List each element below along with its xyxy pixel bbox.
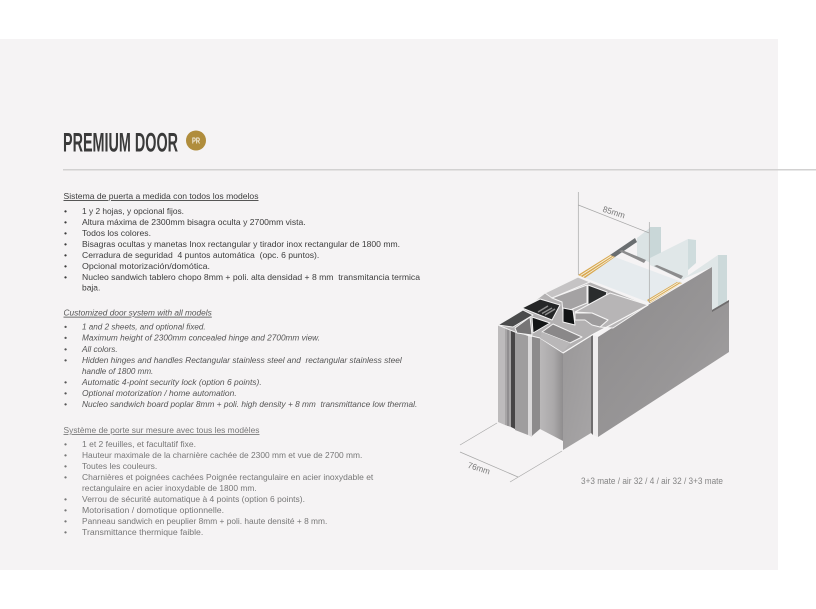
list: English features: Nucleo sandwich board poplar 8mm + poli. high density + 8 mm transmittance low thermal. [82, 399, 417, 409]
list: English features: handle of 1800 mm. [82, 366, 153, 376]
text block: English specification [64, 308, 417, 409]
list: Spanish features: Bisagras ocultas y manetas Inox rectangular y tirador inox rectangular de 1800 mm. [82, 239, 400, 249]
gasket block [522, 299, 560, 320]
gold insulation strips [578, 255, 682, 303]
list: Spanish features: Cerradura de seguridad 4 puntos automática (opc. 6 puntos). [82, 250, 319, 260]
dimension: 76mm: 76mm [466, 460, 491, 476]
text block: Spanish specification [64, 191, 420, 292]
front column and side faces [498, 325, 598, 450]
black chamber [532, 317, 550, 333]
upper flange [545, 277, 590, 298]
title: PREMIUM DOOR [63, 128, 178, 158]
list: Spanish features: Nucleo sandwich tablero chopo 8mm + poli. alta densidad + 8 mm transmitancia termica [82, 272, 420, 282]
list: French features: • [64, 450, 67, 460]
list: Spanish features: • [64, 250, 67, 260]
front edge highlight [563, 305, 648, 353]
list: French features: Transmittance thermique faible. [82, 527, 203, 537]
profile cross-section [498, 277, 648, 353]
list: French features [64, 439, 374, 537]
list: Spanish features: • [64, 217, 67, 227]
heading: French: Système de porte sur mesure avec tous les modèles [64, 425, 260, 435]
list: French features: • [64, 516, 67, 526]
list: French features: • [64, 494, 67, 504]
list: Spanish features: • [64, 261, 67, 271]
heading: Spanish: Sistema de puerta a medida con todos los modelos [64, 191, 258, 201]
lower chamber lit face [540, 332, 570, 352]
list: French features: rectangulaire en acier inoxydable de 1800 mm. [82, 483, 257, 493]
dimension: 85mm: 85mm [601, 204, 626, 220]
large right chamber [575, 293, 648, 328]
list: French features: Panneau sandwich en peuplier 8mm + poli. haute densité + 8 mm. [82, 516, 327, 526]
list: Spanish features: • [64, 239, 67, 249]
gasket slats [538, 306, 555, 315]
list: French features: • [64, 439, 67, 449]
list: English features: • [64, 377, 67, 387]
lower chamber [542, 324, 582, 343]
list: French features: • [64, 527, 67, 537]
list: English features: Optional motorization / home automation. [82, 388, 237, 398]
list: English features: 1 and 2 sheets, and optional fixed. [82, 322, 206, 332]
wall panel [598, 267, 729, 437]
list: French features: Hauteur maximale de la charnière cachée de 2300 mm et vue de 2700 mm. [82, 450, 362, 460]
list: Spanish features: • [64, 272, 67, 282]
list: French features: • [64, 472, 67, 482]
text block: French specification [64, 425, 374, 537]
list: English features: • [64, 344, 67, 354]
list: Spanish features: • [64, 228, 67, 238]
list: English features: Automatic 4-point security lock (option 6 points). [81, 377, 262, 387]
heading: English: Customized door system with all models [64, 308, 212, 318]
list: English features: Maximum height of 2300mm concealed hinge and 2700mm view. [82, 333, 320, 343]
list: Spanish features [64, 206, 420, 292]
glass panes [637, 227, 727, 312]
narrow dark chamber [563, 308, 575, 325]
left chamber inner wall [515, 317, 532, 335]
list: English features: • [64, 322, 67, 332]
badge: PR: PR [192, 136, 200, 146]
list: French features: Verrou de sécurité automatique à 4 points (option 6 points). [82, 494, 305, 504]
list: French features: Charnières et poignées cachées Poignée rectangulaire en acier inoxydable et [82, 472, 374, 482]
list: Spanish features: baja. [82, 282, 100, 292]
list: French features: Motorisation / domotique optionnelle. [82, 505, 224, 515]
list: Spanish features: 1 y 2 hojas, y opcional fijos. [82, 206, 184, 216]
list: Spanish features: Opcional motorización/domótica. [82, 261, 210, 271]
list: French features: • [64, 461, 67, 471]
list: French features: Toutes les couleurs. [82, 461, 157, 471]
list: French features: 1 et 2 feuilles, et facultatif fixe. [82, 439, 196, 449]
dimension: 76mm [460, 423, 562, 482]
list: English features: • [64, 355, 67, 365]
door profile cutaway illustration [460, 192, 729, 482]
rear frame rail [610, 238, 637, 257]
list: Spanish features: Todos los colores. [82, 228, 151, 238]
list: English features [64, 322, 417, 409]
glass specification caption: 3+3 mate / air 32 / 4 / air 32 / 3+3 mate [581, 476, 723, 486]
upper chamber [552, 285, 587, 313]
list: English features: • [64, 399, 67, 409]
list: English features: • [64, 333, 67, 343]
dimension: 85mm [578, 192, 649, 303]
list: English features: All colors. [81, 344, 118, 354]
left chamber top [498, 310, 533, 327]
badge: PR [186, 130, 206, 150]
list: Spanish features: • [64, 206, 67, 216]
list: French features: • [64, 505, 67, 515]
dark chamber [588, 285, 607, 307]
list: English features: Hidden hinges and handles Rectangular stainless steel and rectangular stainless steel [82, 355, 403, 365]
stepped notch [575, 313, 608, 327]
glazing surface with spacers [585, 250, 683, 303]
list: English features: • [64, 388, 67, 398]
list: Spanish features: Altura máxima de 2300mm bisagra oculta y 2700mm vista. [82, 217, 306, 227]
